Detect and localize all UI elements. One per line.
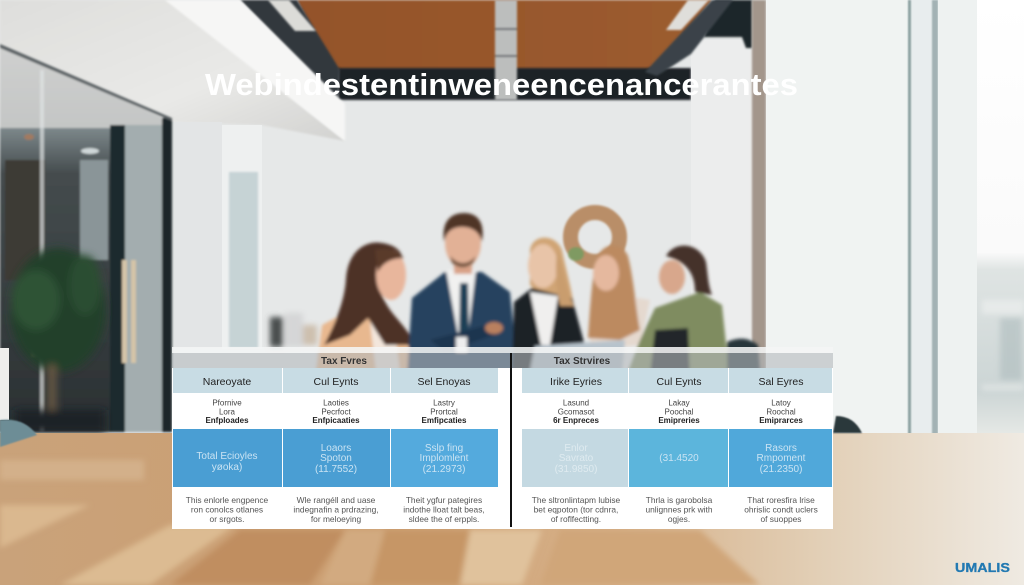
feature text 1: Enfploades <box>205 416 249 425</box>
ceiling: right dark corner <box>704 0 752 48</box>
blue cell 1 <box>173 429 282 487</box>
person: woman in olive jacket <box>628 246 729 372</box>
feature text 2: Enfpicaaties <box>312 416 360 425</box>
right wall: window strip <box>938 0 977 435</box>
description 5 <box>645 495 713 524</box>
header cell 6: Sal Eyres <box>759 376 803 388</box>
wall: left column <box>172 122 222 348</box>
right window <box>977 0 1024 435</box>
person: woman in peach, far left <box>316 243 424 372</box>
description 6 <box>744 495 818 524</box>
ceiling: right dark beam <box>645 0 733 76</box>
blue cell 6: (21.2350) <box>760 464 802 475</box>
header cell 1 <box>173 368 282 393</box>
wall: narrow window <box>229 172 258 348</box>
distant buildings <box>982 300 1024 390</box>
blue cell 4 <box>522 429 628 487</box>
feature text 2 <box>312 398 360 425</box>
header cell 4: Irike Eyries <box>550 376 602 388</box>
feature text 6: Emiprarces <box>759 416 803 425</box>
panel: left table <box>173 356 498 524</box>
feature text 4: Gcomasot <box>558 408 595 416</box>
feature text 4 <box>553 398 599 425</box>
feature text 5: Poochal <box>665 408 694 416</box>
description 2: for meloeying <box>311 514 361 524</box>
blue cell 2: Spoton <box>320 453 352 464</box>
person: blonde woman in black blazer <box>512 238 592 372</box>
heading: left table: Tax Fvres <box>321 356 367 367</box>
logo: UMALIS <box>955 560 1010 575</box>
description 6: ohrislic condt uclers <box>744 504 818 514</box>
right wall: column <box>752 0 766 435</box>
wall decoration: wreath <box>568 212 620 262</box>
header cell 1: Nareoyate <box>203 376 251 388</box>
chair behind <box>727 339 760 372</box>
blue cell 3: Implomlent <box>420 453 469 464</box>
right wall: panel <box>766 0 908 435</box>
blue cell 4: Savrato <box>559 453 594 464</box>
ceiling: left vent <box>268 0 316 31</box>
shelf items behind people <box>270 313 317 347</box>
blue cell 3: Sslp fing <box>425 443 463 454</box>
chair left <box>0 420 37 447</box>
description 1: or srgots. <box>210 514 244 524</box>
back wall <box>0 0 1024 440</box>
plant <box>10 248 106 432</box>
blue cell 2: Loaors <box>321 443 351 454</box>
blue cell 6 <box>729 429 832 487</box>
ceiling: right vent <box>666 0 709 30</box>
ceiling: right white wall <box>691 40 752 435</box>
frame line 1 <box>908 0 911 435</box>
description 2 <box>293 495 379 524</box>
feature text 1: Pfornive <box>212 398 242 408</box>
description 4 <box>532 495 621 524</box>
blue cell 4: Enlor <box>564 443 588 454</box>
feature text 3: Emfipcaties <box>422 416 467 425</box>
wall: side return <box>222 125 262 349</box>
blue cell 3: (21.2973) <box>423 464 465 475</box>
title: Webindestentinweneencenancerantes <box>205 67 798 102</box>
blue cell 4: (31.9850) <box>555 464 597 475</box>
blue cell 2 <box>283 429 390 487</box>
panel: right table <box>522 356 832 524</box>
description 4: bet eqpoton (tor cdnra, <box>534 504 618 514</box>
ceiling: grey underside <box>0 0 345 141</box>
description 4: of roflfectting. <box>551 514 601 524</box>
header cell 4 <box>522 368 628 393</box>
feature text 3: Lastry <box>433 398 455 408</box>
description 3: indothe lloat talt beas, <box>403 504 485 514</box>
description 2: Wle rangéll and uase <box>297 495 376 505</box>
blue cell 6: Rmpoment <box>757 453 806 464</box>
description 6: of suoppes <box>761 514 801 524</box>
description 3 <box>403 495 485 524</box>
chair right <box>833 416 862 433</box>
comparison table <box>172 347 833 529</box>
feature text 6 <box>759 398 803 425</box>
people group <box>316 213 760 372</box>
divider between tables <box>510 353 512 527</box>
glass wall <box>0 44 172 432</box>
feature text 1: Lora <box>219 408 236 416</box>
blue cell 3 <box>391 429 498 487</box>
table surface <box>0 433 1024 585</box>
feature text 5: Lakay <box>668 398 690 408</box>
header cell 2: Cul Eynts <box>314 376 358 388</box>
description 1: This enlorle engpence <box>186 495 269 505</box>
feature text 2: Laoties <box>323 398 349 408</box>
header cell 5: Cul Eynts <box>657 376 701 388</box>
feature text 6: Roochal <box>766 408 796 416</box>
feature text 3 <box>422 398 467 425</box>
blue cell 5: (31.4520 <box>659 453 699 464</box>
description 1 <box>186 495 269 524</box>
frame line 2 <box>932 0 938 435</box>
header cell 5 <box>629 368 728 393</box>
feature text 5 <box>658 398 700 425</box>
white box at far left <box>0 348 9 420</box>
description 5: unlignnes prk with <box>645 504 713 514</box>
header cell 3 <box>391 368 498 393</box>
table: translucent header band <box>172 353 833 368</box>
feature text 4: 6r Enpreces <box>553 416 599 425</box>
description 5: ogjes. <box>668 514 690 524</box>
feature text 5: Emipreries <box>658 416 700 425</box>
blue cell 6: Rasors <box>765 443 797 454</box>
description 6: That roresfira lrise <box>747 495 815 505</box>
ceiling: centre vent <box>495 0 517 100</box>
table: white body <box>172 368 833 529</box>
table: white backing top strip <box>172 347 833 353</box>
header cell 2 <box>283 368 390 393</box>
door handles <box>122 260 127 363</box>
ceiling: wood panel <box>297 0 712 70</box>
header cell 3: Sel Enoyas <box>417 376 471 388</box>
feature text 3: Prortcal <box>430 408 458 416</box>
description 4: The sltronlintapm lubise <box>532 495 621 505</box>
description 2: indegnafin a prdrazing, <box>293 504 379 514</box>
laptop <box>530 340 625 372</box>
description 3: Theit ygfur pategires <box>406 495 482 505</box>
person: woman with long light-brown hair <box>588 246 650 350</box>
feature text 6: Latoy <box>771 398 791 408</box>
description 1: ron conolcs otlanes <box>191 504 263 514</box>
blue cell 1: Total Ecioyles <box>196 451 258 462</box>
ceiling: left dark beam <box>240 0 340 100</box>
heading: right table: Tax Strvires <box>554 356 611 367</box>
blue cell 5 <box>629 429 728 487</box>
right wall: frame <box>908 0 938 435</box>
feature text 1 <box>205 398 249 425</box>
blue cell 1: yøoka) <box>212 462 242 473</box>
header cell 6 <box>729 368 832 393</box>
blue cell 2: (11.7552) <box>315 464 357 475</box>
description 5: Thrla is garobolsa <box>646 495 713 505</box>
ceiling: dark band <box>338 68 691 100</box>
description 3: sldee the of erppls. <box>409 514 479 524</box>
feature text 2: Pecrfoct <box>321 408 351 416</box>
person: man in navy suit <box>407 213 518 372</box>
ceiling: white beam <box>165 0 345 141</box>
feature text 4: Lasund <box>563 398 589 408</box>
